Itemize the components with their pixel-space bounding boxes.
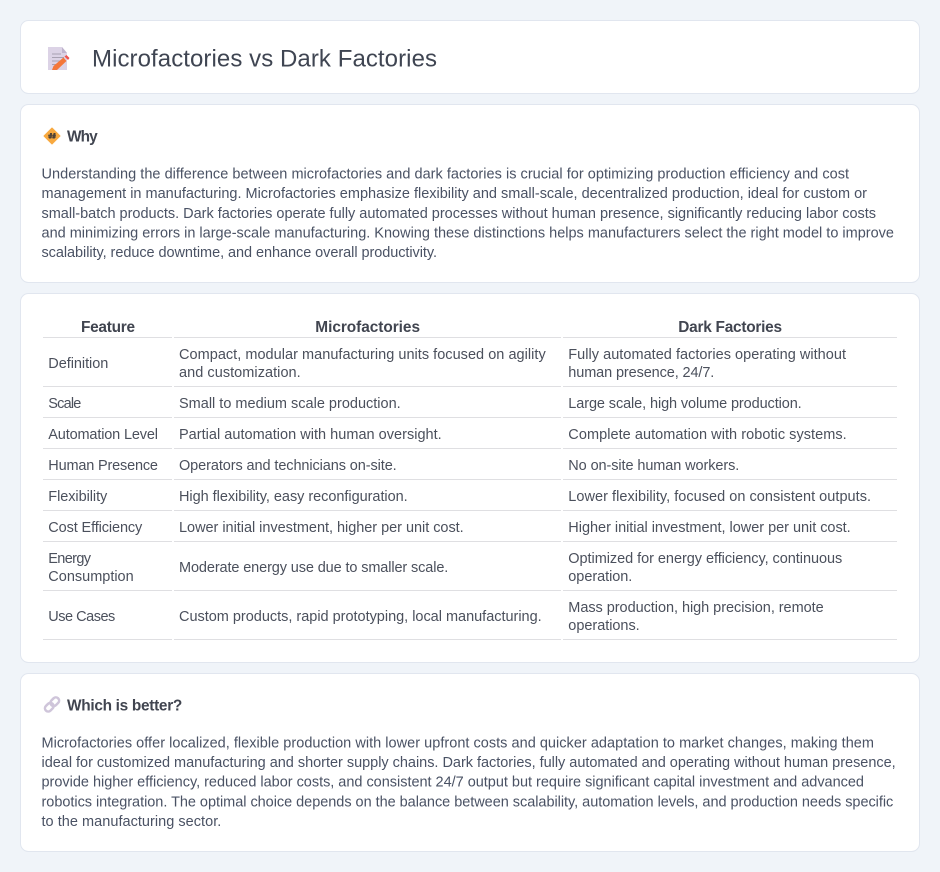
row: human presence: Human Presence xyxy=(48,458,158,474)
text block: why explanation: small-batch products. Dark factories operate fully automated processes without human presence, significantly reducing labor costs xyxy=(42,206,876,222)
text block: why explanation xyxy=(42,166,894,261)
row: scale: Scale xyxy=(48,396,81,412)
text block: which is better explanation: provide higher efficiency, reduced labor costs, and consistent 24/7 output but require significant capital investment and advanced xyxy=(42,775,864,791)
row: energy consumption: operation. xyxy=(568,569,632,585)
row: use cases xyxy=(43,600,897,640)
text block: which is better explanation: ideal for customized manufacturing and shorter supply chains. Dark factories, fully automated and operating without human presence, xyxy=(42,755,896,771)
row: automation level: Complete automation with robotic systems. xyxy=(568,427,847,443)
text block: which is better explanation: Microfactories offer localized, flexible production with lower upfront costs and quicker adaptation to market changes, making them xyxy=(42,736,874,752)
row: energy consumption: Consumption xyxy=(48,569,134,585)
text block: which is better explanation xyxy=(42,736,896,830)
text block: why explanation: scalability, reduce downtime, and enhance overall productivity. xyxy=(42,245,437,261)
panel: comparison table xyxy=(20,294,920,662)
panel: title header xyxy=(20,20,920,94)
row: energy consumption xyxy=(43,551,897,591)
row: automation level: Automation Level xyxy=(48,427,158,443)
row: scale: Small to medium scale production. xyxy=(179,396,401,412)
row: flexibility: Flexibility xyxy=(48,489,108,505)
table header row: Dark Factories xyxy=(678,319,782,336)
row: flexibility xyxy=(43,489,897,511)
icon: chain link xyxy=(44,696,60,713)
row: use cases: operations. xyxy=(568,618,640,634)
row: human presence xyxy=(43,458,897,480)
text block: why explanation: Understanding the difference between microfactories and dark factories is crucial for optimizing production efficiency and cost xyxy=(42,166,849,182)
table header row xyxy=(43,319,897,338)
row: scale xyxy=(43,396,897,418)
text block: why explanation: and minimizing errors in large-scale manufacturing. Knowing these distinctions helps manufacturers select the right model to improve xyxy=(42,225,894,241)
heading: which is better: Which is better? xyxy=(67,698,182,715)
heading: why: Why xyxy=(67,129,98,146)
row: scale: Large scale, high volume production. xyxy=(568,396,802,412)
row: flexibility: High flexibility, easy reconfiguration. xyxy=(179,489,408,505)
row: energy consumption: Optimized for energy efficiency, continuous xyxy=(568,551,842,567)
row: definition: Fully automated factories operating without xyxy=(568,347,846,363)
row: cost efficiency: Higher initial investment, lower per unit cost. xyxy=(568,520,851,536)
table header row: Feature xyxy=(81,319,135,336)
row: cost efficiency xyxy=(43,520,897,542)
row: energy consumption: Energy xyxy=(48,551,92,567)
text block: which is better explanation: robotics integration. The optimal choice depends on the balance between scalability, automation levels, and production needs specific xyxy=(42,794,893,810)
row: human presence: No on-site human workers. xyxy=(568,458,739,474)
row: definition: Definition xyxy=(48,356,108,372)
row: automation level xyxy=(43,427,897,449)
row: use cases: Use Cases xyxy=(48,609,115,625)
table header row: Microfactories xyxy=(315,319,420,336)
text block: which is better explanation: to the manufacturing sector. xyxy=(42,814,221,830)
row: definition: Compact, modular manufacturing units focused on agility xyxy=(179,347,546,363)
row: human presence: Operators and technicians on-site. xyxy=(179,458,397,474)
row: definition: human presence, 24/7. xyxy=(568,365,714,381)
row: use cases: Custom products, rapid prototyping, local manufacturing. xyxy=(179,609,542,625)
icon: warning diamond xyxy=(44,128,60,144)
title: Microfactories vs Dark Factories xyxy=(92,46,437,72)
row: definition xyxy=(43,347,897,387)
row: cost efficiency: Lower initial investment, higher per unit cost. xyxy=(179,520,464,536)
panel: why xyxy=(20,104,920,282)
text block: why explanation: management in manufacturing. Microfactories emphasize flexibility and small-scale, decentralized production, ideal for custom or xyxy=(42,186,867,202)
panel: which is better xyxy=(20,674,920,852)
row: flexibility: Lower flexibility, focused on consistent outputs. xyxy=(568,489,871,505)
row: automation level: Partial automation with human oversight. xyxy=(179,427,442,443)
icon: document with pencil xyxy=(48,47,70,70)
row: energy consumption: Moderate energy use due to smaller scale. xyxy=(179,560,448,576)
row: definition: and customization. xyxy=(179,365,301,381)
row: cost efficiency: Cost Efficiency xyxy=(48,520,143,536)
row: use cases: Mass production, high precision, remote xyxy=(568,600,824,616)
